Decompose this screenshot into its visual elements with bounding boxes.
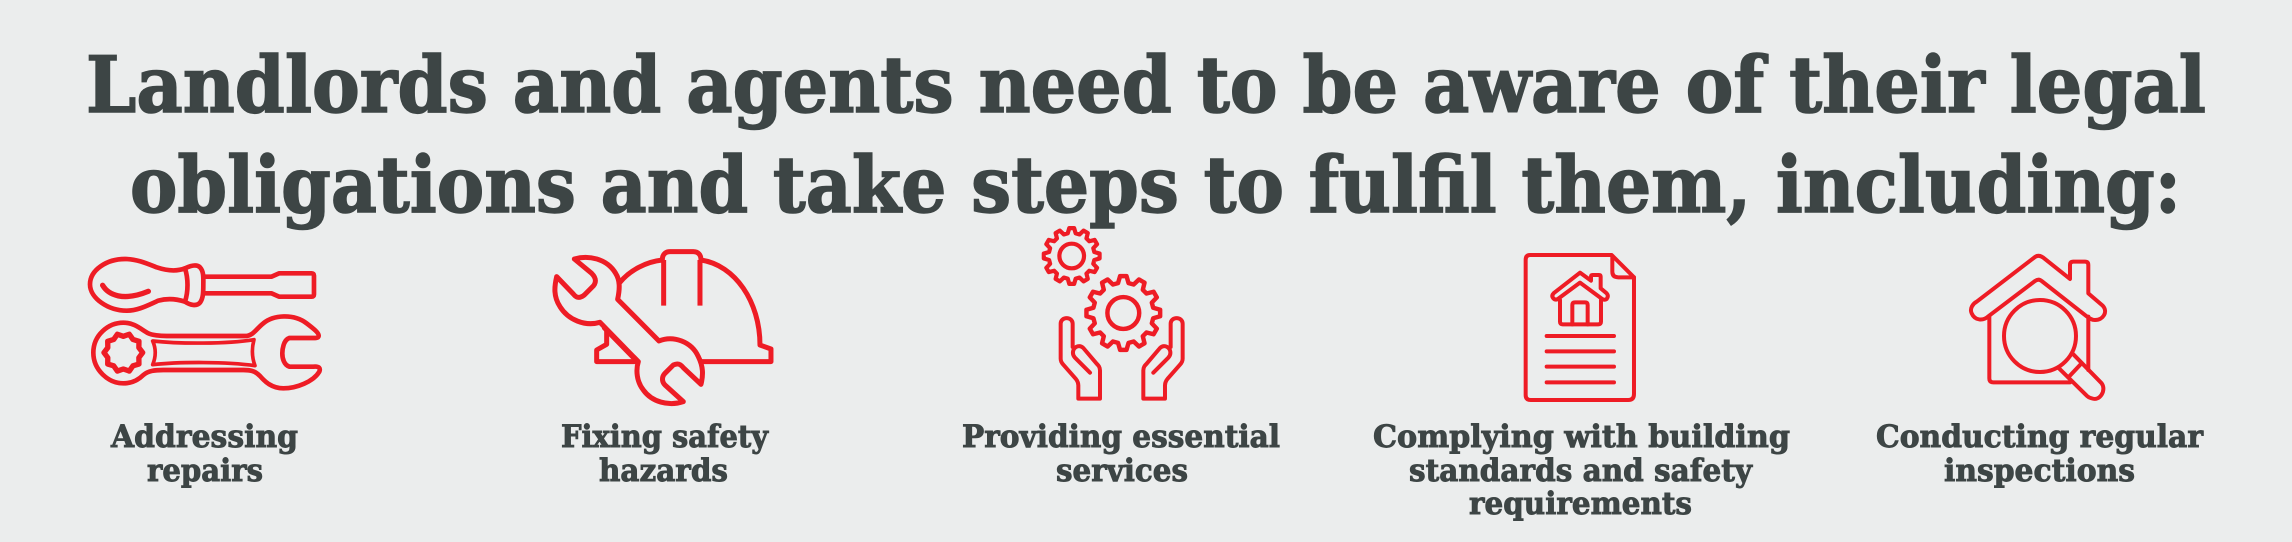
label: fixing safety hazards: hazards — [599, 453, 728, 489]
icon: screwdriver and spanner — [90, 259, 320, 388]
label: complying with building standards — [1373, 419, 1790, 522]
label: conducting regular inspections — [1876, 419, 2204, 489]
label: complying with building standards: requirements — [1469, 486, 1692, 522]
icon: gears and hands — [1044, 228, 1183, 399]
label: providing essential services: Providing essential — [962, 419, 1280, 455]
label: addressing repairs: repairs — [147, 453, 263, 489]
label: complying with building standards: standards and safety — [1409, 453, 1753, 489]
label: conducting regular inspections: inspections — [1944, 453, 2135, 489]
label: conducting regular inspections: Conducting regular — [1876, 419, 2204, 455]
icon: hard hat and wrench — [555, 252, 771, 404]
label: addressing repairs — [110, 419, 298, 489]
icon: house with magnifier — [1971, 256, 2105, 399]
label: providing essential services: services — [1056, 453, 1188, 489]
label: addressing repairs: Addressing — [110, 419, 298, 455]
label: complying with building standards: Complying with building — [1373, 419, 1790, 455]
label: fixing safety hazards: Fixing safety — [561, 419, 769, 455]
label: providing essential services — [962, 419, 1280, 489]
icon: document with house — [1526, 255, 1634, 400]
title — [86, 40, 2206, 231]
label: fixing safety hazards — [561, 419, 769, 489]
